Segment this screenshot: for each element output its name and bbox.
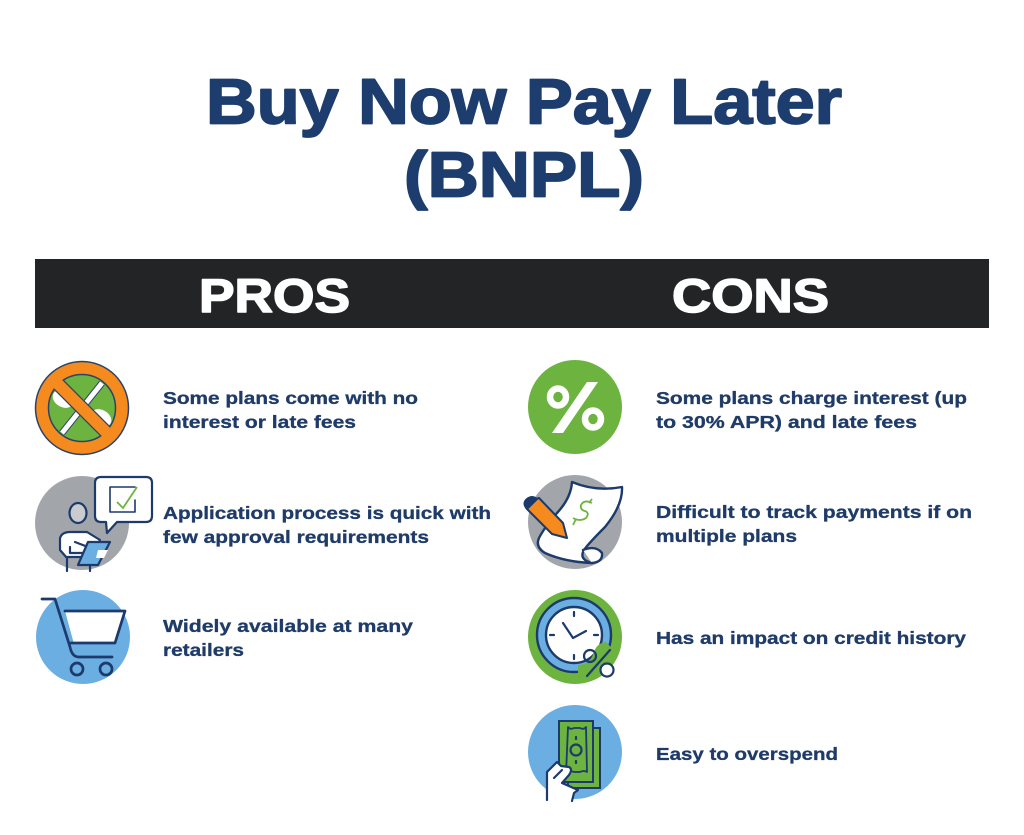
icon: clock and percent: [528, 590, 622, 684]
text: application: few approval requirements: [163, 527, 429, 547]
icon: application: [35, 476, 152, 571]
text: interest charges: to 30% APR) and late fees: [656, 412, 917, 432]
text: tracking payments: Difficult to track payments if on: [656, 502, 972, 522]
text: tracking payments: [656, 502, 972, 546]
text: application: [163, 503, 491, 547]
text: availability: [163, 616, 413, 660]
heading: cons: CONS: [672, 269, 829, 322]
icon: cash in hand: [528, 705, 622, 801]
icon: no percent: [36, 362, 128, 454]
panel: cons: [524, 360, 972, 801]
text: credit history: Has an impact on credit history: [656, 628, 966, 648]
title: [206, 66, 842, 210]
text: interest charges: Some plans charge interest (up: [656, 388, 967, 408]
text: no interest: [163, 388, 418, 432]
heading: pros: PROS: [199, 269, 350, 322]
icon: paper and pencil: [524, 475, 622, 569]
text: interest charges: [656, 388, 967, 432]
icon: percent: [528, 360, 622, 454]
icon: shopping cart: [36, 590, 130, 684]
text: no interest: interest or late fees: [163, 412, 356, 432]
text: overspend: Easy to overspend: [656, 744, 838, 764]
header bar: [35, 259, 989, 328]
text: no interest: Some plans come with no: [163, 388, 418, 408]
text: application: Application process is quick with: [163, 503, 491, 523]
title: (BNPL): [404, 138, 644, 210]
text: availability: Widely available at many: [163, 616, 413, 636]
panel: pros: [35, 362, 491, 684]
text: availability: retailers: [163, 640, 244, 660]
title: Buy Now Pay Later: [206, 66, 842, 138]
text: tracking payments: multiple plans: [656, 526, 797, 546]
